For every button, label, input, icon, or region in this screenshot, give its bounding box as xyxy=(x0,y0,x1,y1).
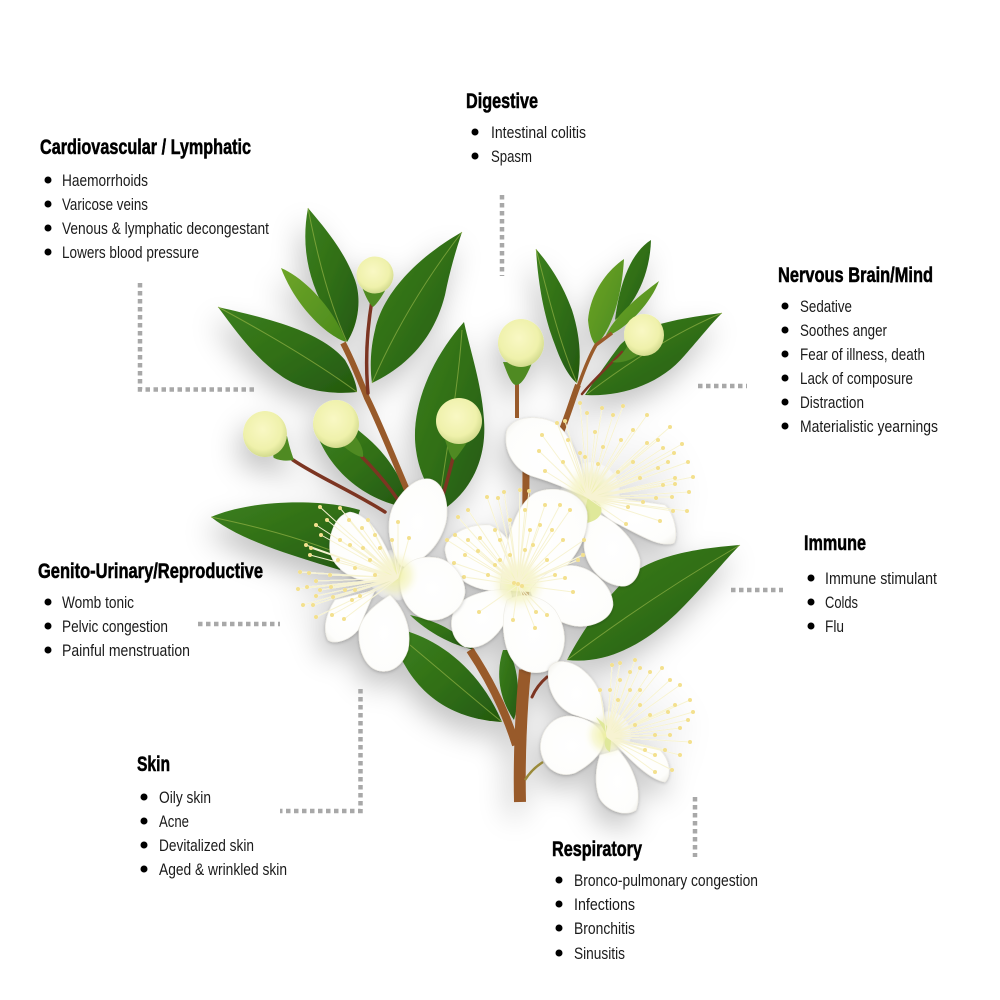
flower: bottom right xyxy=(541,660,693,813)
text block: respiratory xyxy=(552,838,758,963)
plant illustration: myrtle sprig xyxy=(211,208,740,813)
heading: skin: Skin xyxy=(137,753,170,776)
text block: cardiovascular / lymphatic xyxy=(40,136,269,262)
flower centre glow xyxy=(560,462,620,522)
text block: nervous brain/mind xyxy=(778,264,938,436)
list: respiratory: Infections xyxy=(574,895,635,914)
list: genito-urinary: Painful menstruation xyxy=(62,641,190,660)
list: immune: Colds xyxy=(825,593,858,612)
list: cardiovascular: Lowers blood pressure xyxy=(62,243,199,262)
flower centre glow xyxy=(488,553,548,613)
list: digestive: Intestinal colitis xyxy=(491,123,586,142)
list: genito-urinary: Pelvic congestion xyxy=(62,617,168,636)
list: immune xyxy=(808,569,937,636)
list: immune: Flu xyxy=(825,617,844,636)
connector: genito-urinary xyxy=(198,622,280,626)
list: respiratory: Bronchitis xyxy=(574,919,635,938)
flower: left xyxy=(298,479,465,671)
list: nervous xyxy=(782,297,938,436)
list: nervous: Materialistic yearnings xyxy=(800,417,938,436)
list: nervous: Soothes anger xyxy=(800,321,887,340)
connector: skin xyxy=(280,689,360,811)
heading: cardiovascular: Cardiovascular / Lymphatic xyxy=(40,136,251,159)
flower: upper right xyxy=(506,403,693,586)
text block: digestive xyxy=(466,90,586,166)
list: genito-urinary: Womb tonic xyxy=(62,593,134,612)
connector: digestive xyxy=(500,195,504,276)
list: cardiovascular: Venous & lymphatic decongestant xyxy=(62,219,269,238)
list: nervous: Lack of composure xyxy=(800,369,913,388)
heading: digestive: Digestive xyxy=(466,90,538,113)
heading: immune: Immune xyxy=(804,532,866,555)
list: skin: Oily skin xyxy=(159,788,211,807)
stems xyxy=(293,300,622,802)
connector: cardiovascular xyxy=(140,283,255,390)
text block: genito-urinary/reproductive xyxy=(38,560,263,660)
flower centre glow xyxy=(583,711,631,759)
list: nervous: Sedative xyxy=(800,297,852,316)
connector: nervous xyxy=(698,384,747,388)
connector: immune xyxy=(731,588,783,592)
heading: respiratory: Respiratory xyxy=(552,838,642,861)
flower buds xyxy=(243,256,664,461)
flower centre glow xyxy=(369,549,421,601)
list: skin xyxy=(140,788,287,879)
list: nervous: Fear of illness, death xyxy=(800,345,925,364)
list: nervous: Distraction xyxy=(800,393,864,412)
list: immune: Immune stimulant xyxy=(825,569,937,588)
flower: centre xyxy=(445,489,613,673)
text block: skin xyxy=(137,753,287,879)
heading: nervous: Nervous Brain/Mind xyxy=(778,264,933,287)
list: respiratory: Sinusitis xyxy=(574,944,625,963)
list: cardiovascular: Varicose veins xyxy=(62,195,148,214)
connector: respiratory xyxy=(693,797,697,857)
list: cardiovascular xyxy=(44,171,269,262)
list: respiratory xyxy=(556,871,758,963)
list: digestive: Spasm xyxy=(491,147,532,166)
text block: immune xyxy=(804,532,937,636)
list: genito-urinary xyxy=(44,593,190,660)
leaves xyxy=(211,208,740,722)
list: skin: Devitalized skin xyxy=(159,836,254,855)
list: cardiovascular: Haemorrhoids xyxy=(62,171,148,190)
list: digestive xyxy=(472,123,586,166)
heading: genito-urinary: Genito-Urinary/Reproductive xyxy=(38,560,263,583)
list: skin: Acne xyxy=(159,812,189,831)
list: skin: Aged & wrinkled skin xyxy=(159,860,287,879)
list: respiratory: Bronco-pulmonary congestion xyxy=(574,871,758,890)
